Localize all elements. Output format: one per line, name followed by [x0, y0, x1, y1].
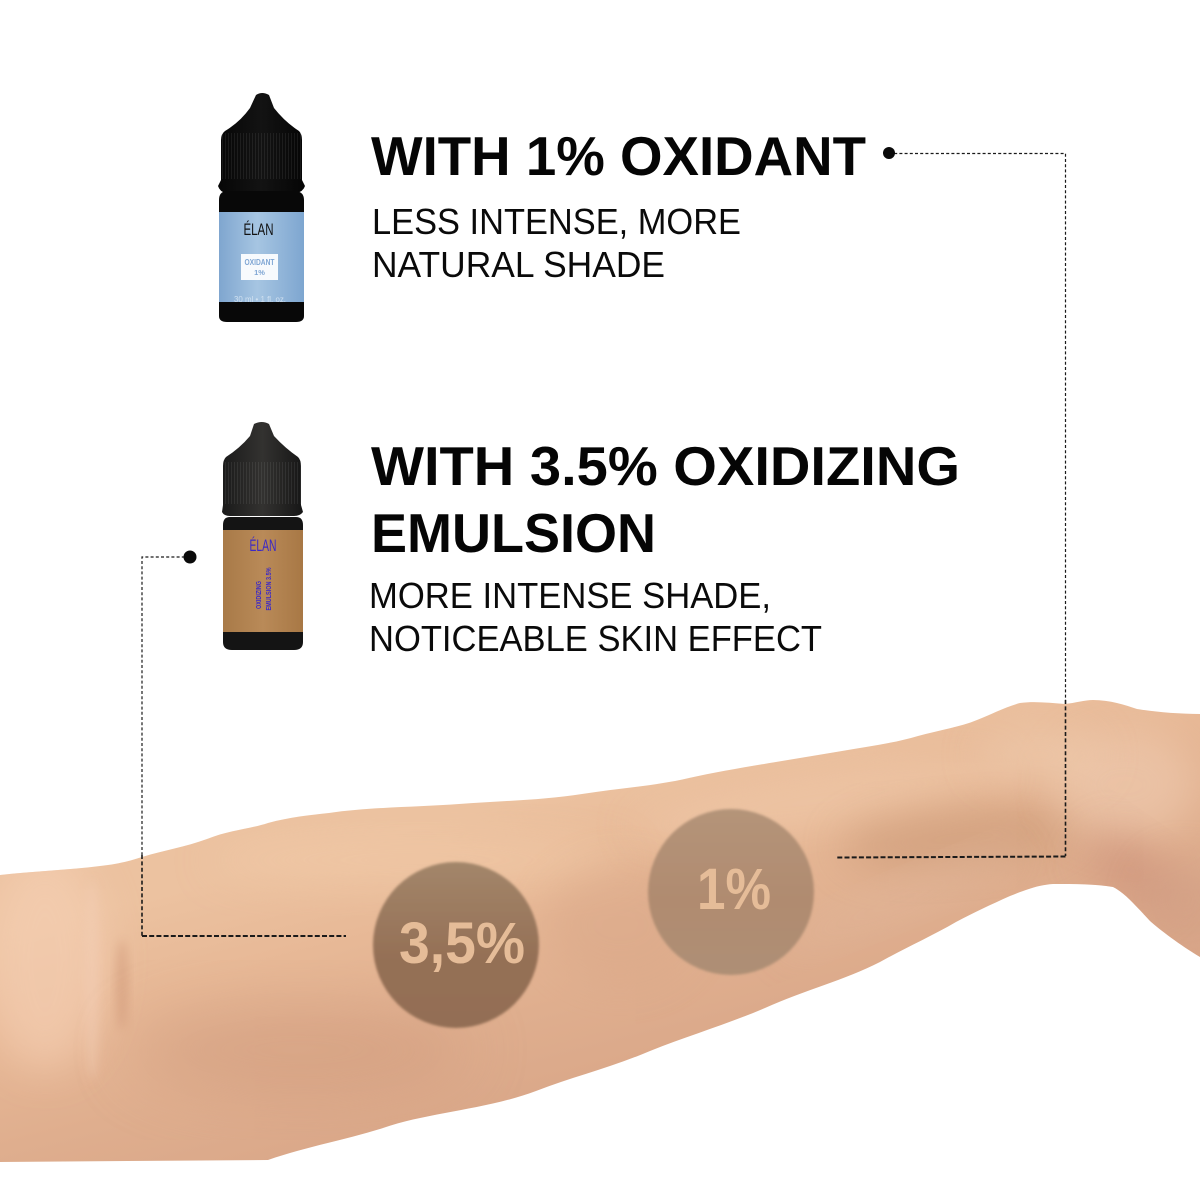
- rotated product name: EMULSION 3.5%: [264, 567, 273, 610]
- rotated product name: [254, 567, 273, 610]
- bottle: oxidizing emulsion 3.5%: [222, 422, 303, 650]
- description: 1% oxidant: NATURAL SHADE: [372, 244, 665, 285]
- tag text: oxidant: OXIDANT: [244, 258, 275, 267]
- description: 3.5% emulsion: MORE INTENSE SHADE,: [369, 575, 771, 616]
- connector: 1% oxidant to spot: [837, 147, 1066, 858]
- blue label: [219, 212, 304, 302]
- heading: with 1% oxidant: WITH 1% OXIDANT: [371, 125, 866, 187]
- brand: ELAN: ÉLAN: [244, 220, 274, 239]
- brown label: [223, 530, 303, 632]
- cap ribs: [221, 133, 302, 179]
- heading: with 3.5% oxidizing emulsion: EMULSION: [371, 502, 656, 564]
- bottle cap: [222, 422, 303, 516]
- bottle body: [223, 517, 303, 650]
- spot label: 3,5%: 3,5%: [399, 911, 525, 976]
- bottle: oxidant 1%: [218, 93, 305, 322]
- description: 1% oxidant: [372, 201, 741, 285]
- description: 3.5% emulsion: NOTICEABLE SKIN EFFECT: [369, 618, 822, 659]
- white product tag: [241, 254, 278, 280]
- brand: ELAN: ÉLAN: [250, 536, 276, 555]
- volume text: 30 ml • 1 fl. oz.: [234, 294, 286, 304]
- 1% test spot: [648, 809, 814, 975]
- tag text: 1%: 1%: [254, 268, 265, 277]
- description: 1% oxidant: LESS INTENSE, MORE: [372, 201, 741, 242]
- heading: with 3.5% oxidizing emulsion: [371, 435, 960, 564]
- bottle body: [219, 191, 304, 322]
- rotated product name: OXIDIZING: [254, 581, 263, 609]
- 3.5% test spot: [373, 862, 539, 1028]
- bottle cap: [218, 93, 305, 193]
- spot label: 1%: 1%: [697, 857, 771, 922]
- connector: 3.5% emulsion to spot: [142, 550, 346, 936]
- forearm photo illustration: [0, 690, 1200, 1170]
- description: 3.5% emulsion: [369, 575, 822, 659]
- cap ribs: [223, 462, 301, 504]
- heading: with 3.5% oxidizing emulsion: WITH 3.5% OXIDIZING: [371, 435, 960, 497]
